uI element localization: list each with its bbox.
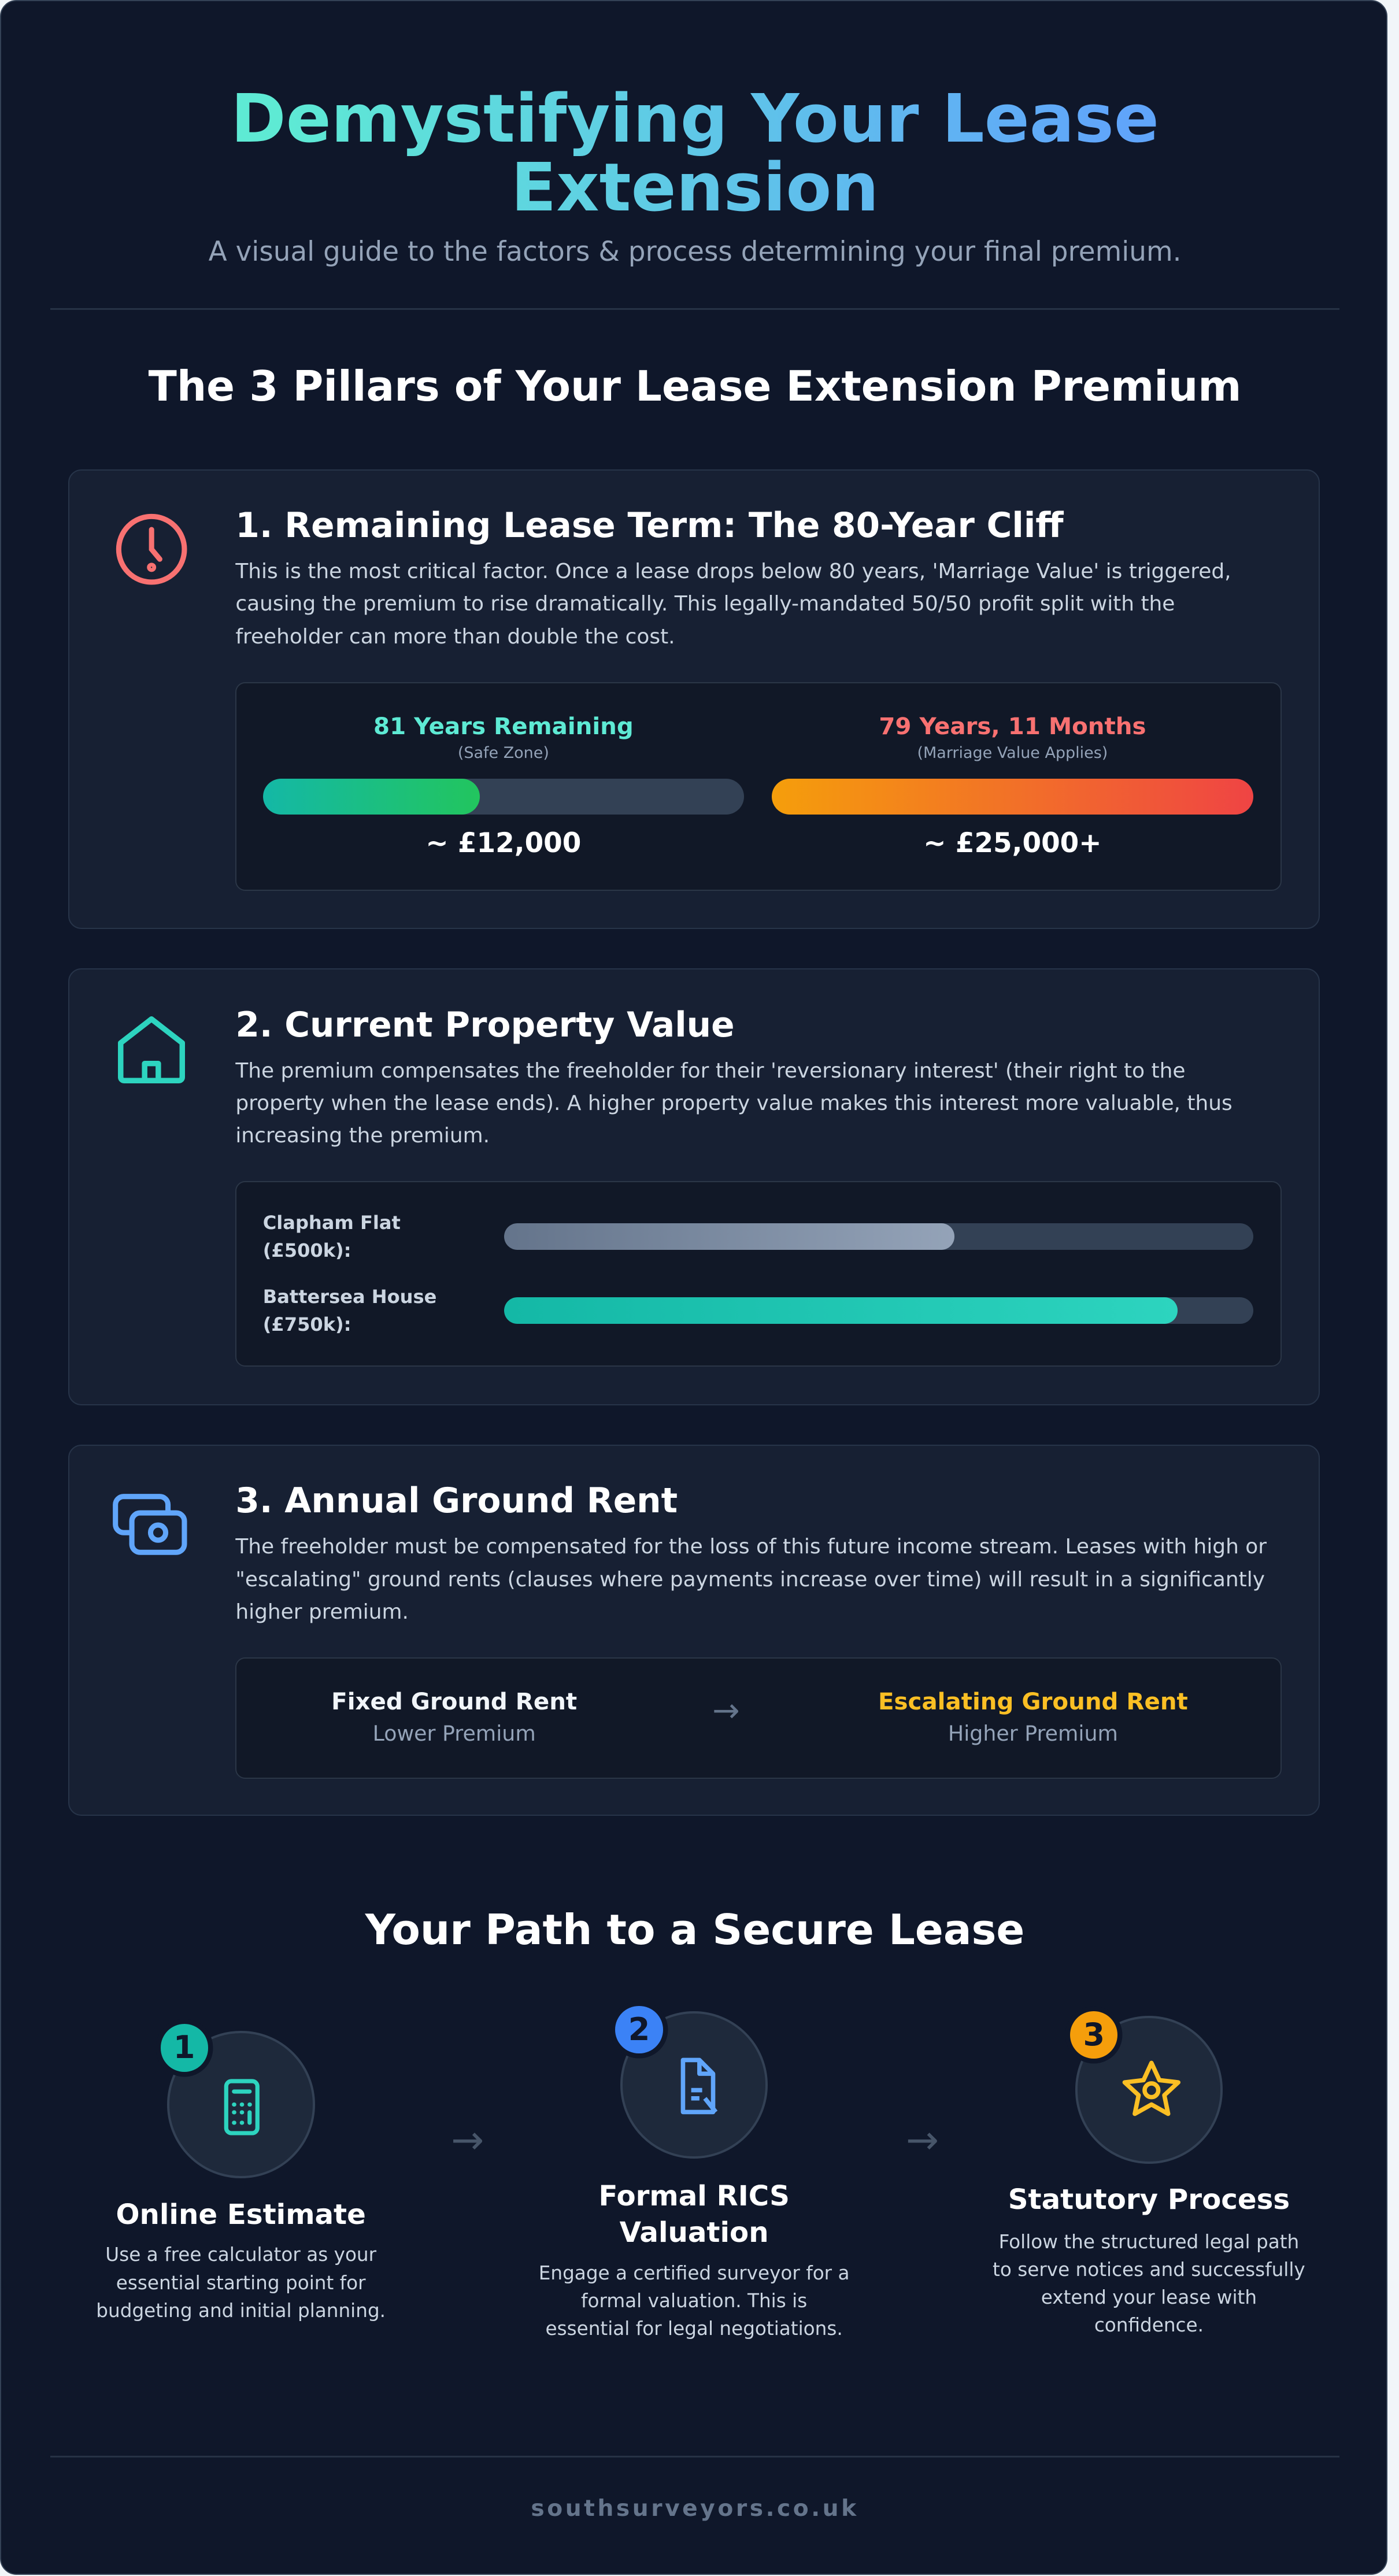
chart: lease comparison: ~ £25,000+ — [923, 828, 1102, 859]
chart: lease comparison: ~ £12,000 — [425, 828, 581, 859]
icon: calculator — [167, 2031, 314, 2178]
chart: lease comparison: (Safe Zone) — [458, 744, 549, 762]
chart: property bars — [235, 1181, 1282, 1367]
subtitle: A visual guide to the factors & process determining your final premium. — [209, 236, 1182, 268]
comparison: fixed vs escalating: Fixed Ground Rent — [331, 1688, 577, 1715]
chart: property bars: Clapham Flat — [263, 1212, 401, 1234]
icon: document — [620, 2011, 768, 2159]
heading: 3 pillars: The 3 Pillars of Your Lease Extension Premium — [149, 362, 1241, 411]
chart: lease comparison: (Marriage Value Applies) — [917, 744, 1108, 762]
heading: 1. Remaining Lease Term: The 80-Year Cliff — [235, 506, 1064, 546]
comparison: fixed vs escalating: Escalating Ground Rent — [878, 1688, 1188, 1715]
icon: money — [113, 1494, 187, 1555]
step 1: 1 — [173, 2029, 195, 2066]
step 2: Engage a certified surveyor for a formal valuation. This is essential for legal negotiations. — [539, 2262, 850, 2340]
comparison: fixed vs escalating: Lower Premium — [373, 1721, 536, 1746]
comparison: fixed vs escalating — [235, 1657, 1282, 1779]
chart: lease comparison: 79 Years, 11 Months — [879, 713, 1146, 740]
step 1 — [96, 2024, 386, 2322]
chart: property bars: (£500k): — [263, 1239, 351, 1261]
text: This is the most critical factor. Once a lease drops below 80 years, 'Marriage Value' is triggered, causing the premium to rise dramatically. This legally-mandated 50/50 profit split with the freeholder can more than double the cost. — [235, 560, 1231, 649]
step 2 — [539, 2006, 850, 2340]
step 3: 3 — [1083, 2016, 1105, 2053]
chart: lease comparison — [235, 682, 1282, 891]
text: The freeholder must be compensated for the loss of this future income stream. Leases with high or "escalating" ground rents (clauses where payments increase over time) will result in a significantly higher premium. — [235, 1535, 1267, 1624]
heading: 2. Current Property Value — [235, 1005, 735, 1045]
arrow: → — [906, 2118, 939, 2163]
comparison: fixed vs escalating: Higher Premium — [948, 1721, 1118, 1746]
panel: ground rent — [68, 1445, 1320, 1816]
chart: lease comparison: 81 Years Remaining — [373, 713, 634, 740]
step 3 — [993, 2011, 1305, 2336]
step 1: Use a free calculator as your essential starting point for budgeting and initial planning. — [96, 2244, 386, 2322]
icon: house — [118, 1016, 185, 1083]
step 2: Formal RICS Valuation — [598, 2180, 790, 2249]
arrow: → — [451, 2118, 484, 2163]
title: Extension — [511, 149, 879, 227]
panel: property value — [68, 968, 1320, 1405]
footer: southsurveyors.co.uk — [531, 2496, 859, 2522]
text: The premium compensates the freeholder for their 'reversionary interest' (their right to the property when the lease ends). A higher property value makes this interest more valuable, thus increasing the premium. — [235, 1059, 1233, 1148]
heading: 3. Annual Ground Rent — [235, 1481, 678, 1521]
icon: star — [1075, 2016, 1223, 2164]
step 2: 2 — [628, 2011, 650, 2048]
chart: property bars: (£750k): — [263, 1313, 351, 1335]
panel: lease term — [68, 469, 1320, 929]
step 3: Statutory Process — [1008, 2183, 1290, 2216]
step 1: Online Estimate — [116, 2199, 366, 2231]
step 3: Follow the structured legal path to serve notices and successfully extend your lease with confidence. — [993, 2231, 1305, 2336]
comparison: fixed vs escalating: → — [712, 1692, 740, 1730]
title: Demystifying Your Lease — [231, 80, 1159, 158]
icon: clock — [116, 513, 187, 585]
heading: path: Your Path to a Secure Lease — [365, 1906, 1024, 1955]
chart: property bars: Battersea House — [263, 1286, 436, 1308]
title — [1, 85, 1389, 223]
